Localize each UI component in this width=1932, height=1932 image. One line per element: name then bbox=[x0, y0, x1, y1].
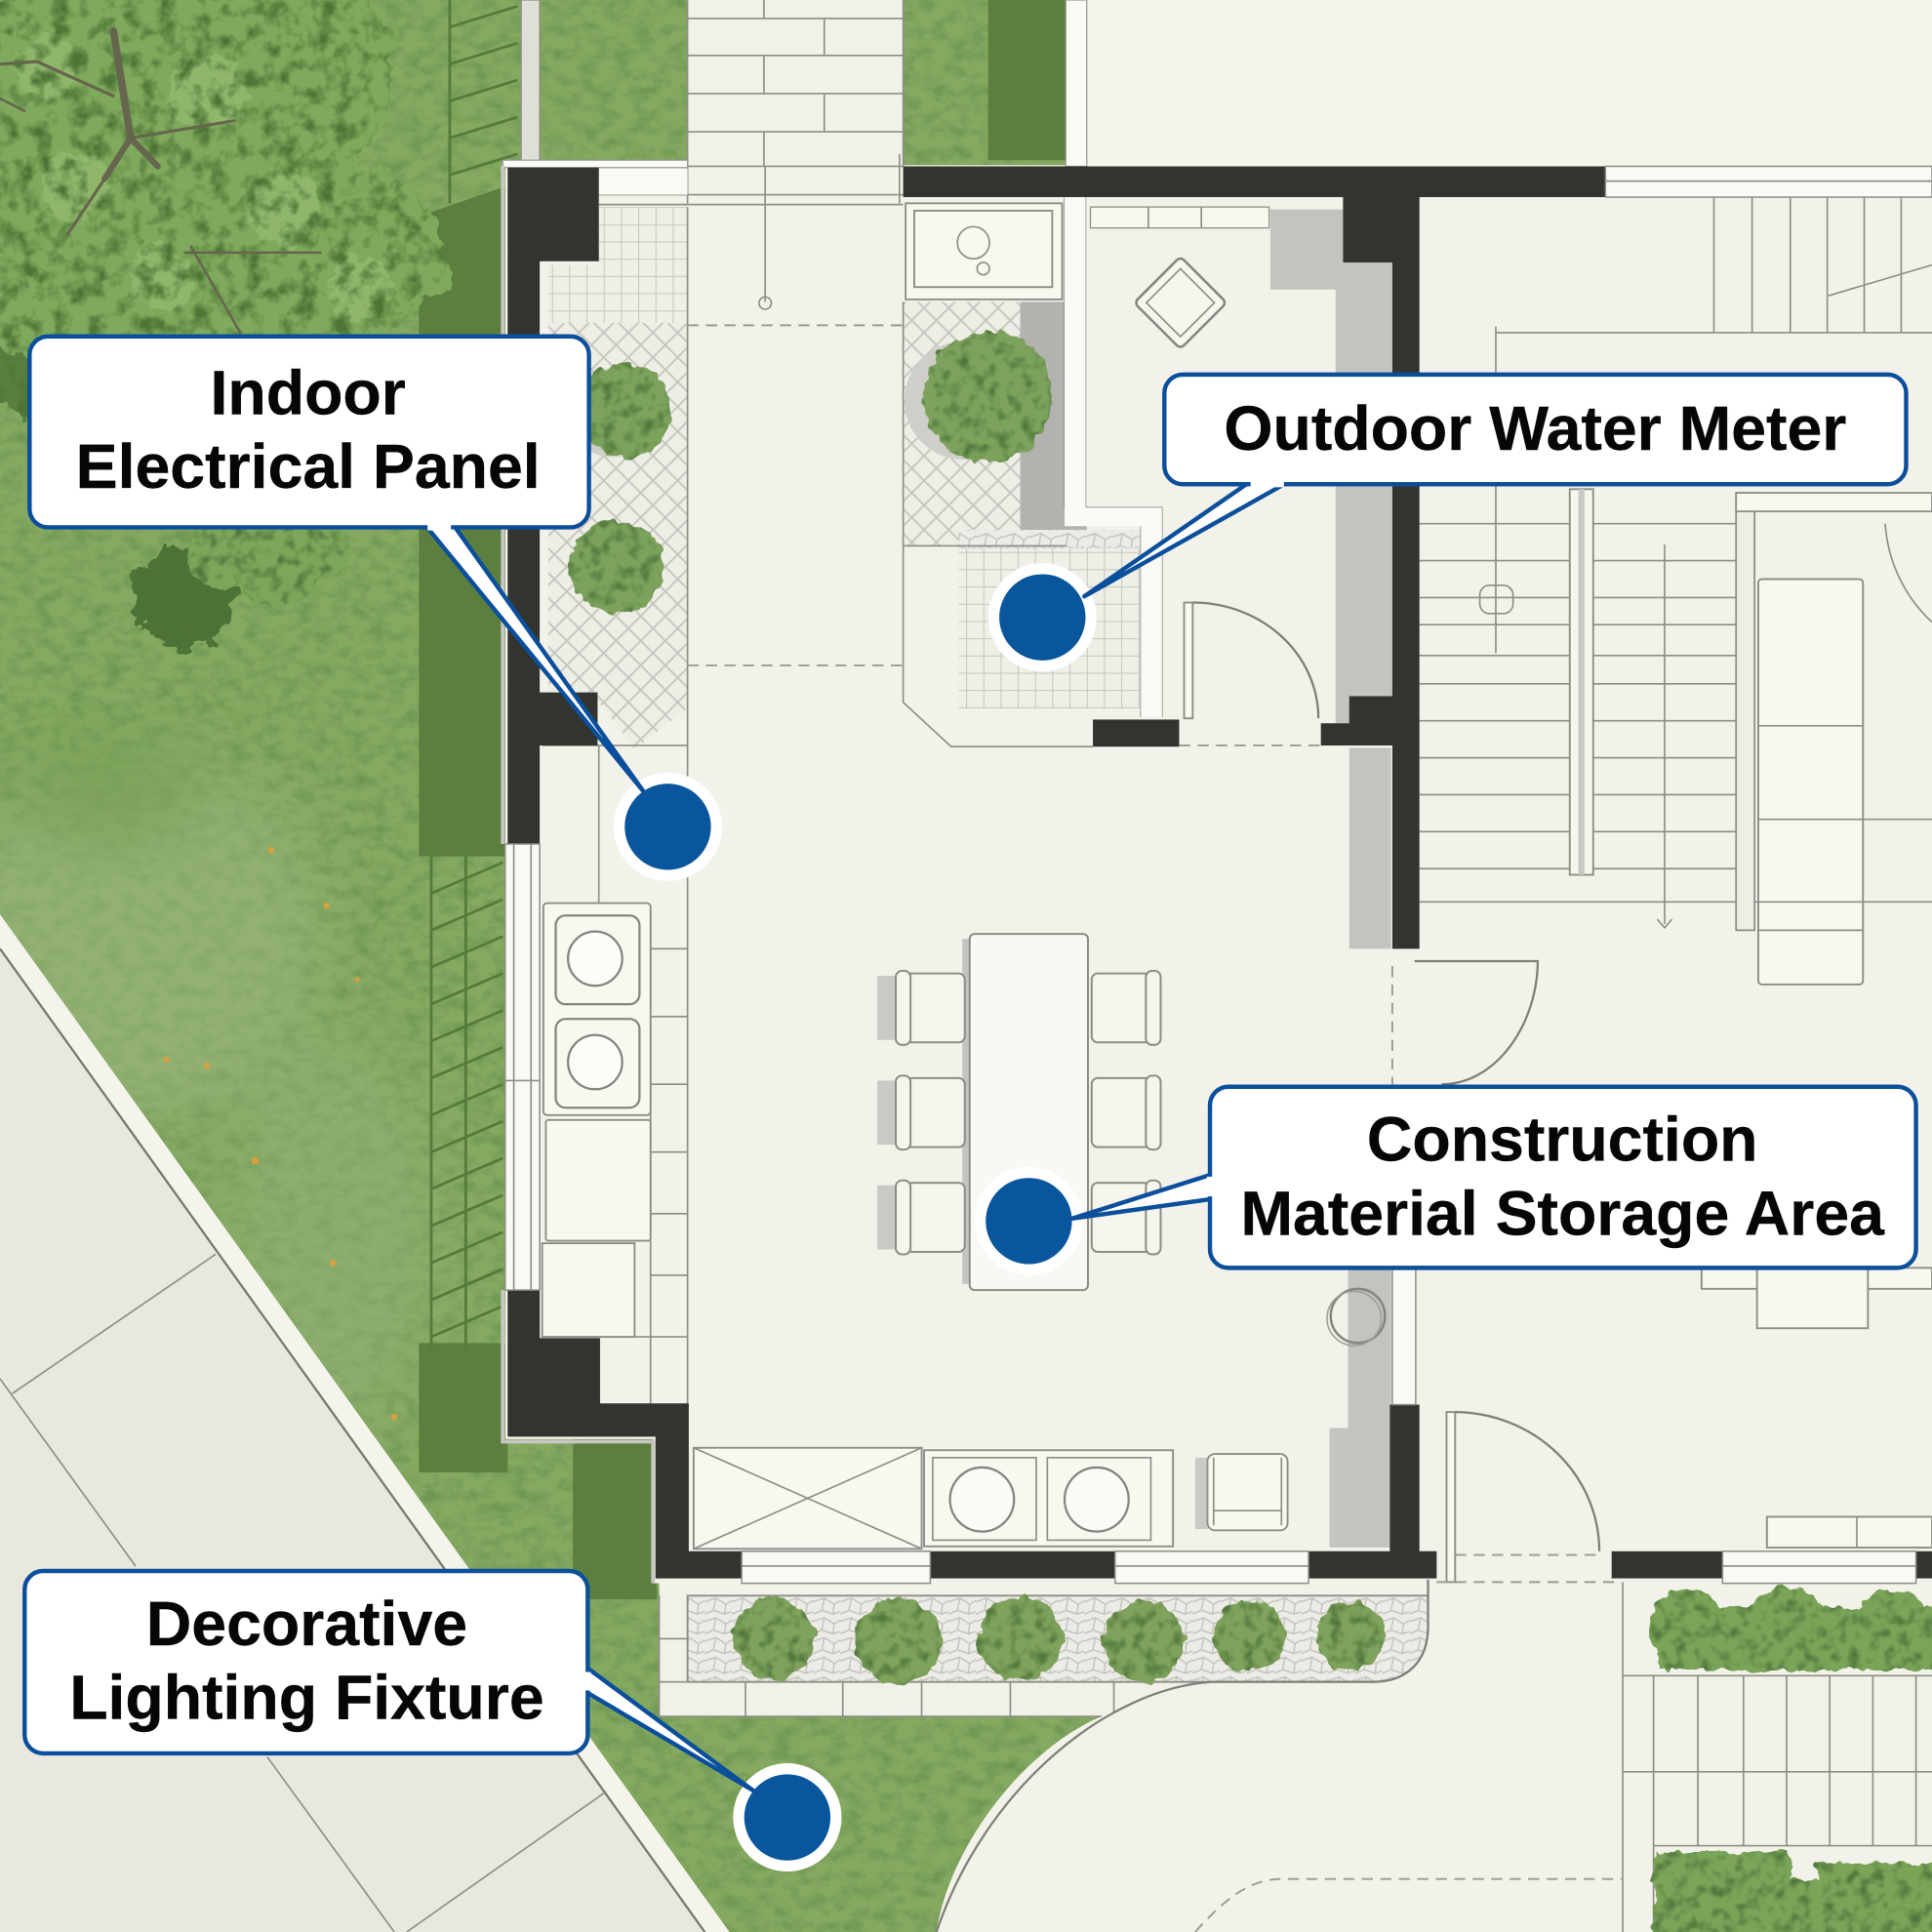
panel: planter and front path bbox=[660, 1580, 1429, 1932]
panel: street pavement bbox=[0, 914, 730, 1932]
callout: Indoor Electrical Panel bbox=[29, 337, 722, 881]
callout: Construction Material Storage Area bbox=[975, 1087, 1916, 1275]
icon: round stool bbox=[1327, 1289, 1385, 1346]
marker: Construction Material Storage Area bbox=[975, 1167, 1083, 1275]
panel: windows bbox=[503, 165, 1932, 1584]
icon: courtyard shrubs bbox=[568, 332, 1054, 614]
chair group bbox=[877, 971, 1161, 1254]
callout: Decorative Lighting Fixture: Decorative bbox=[146, 1589, 467, 1659]
panel: structural walls bbox=[507, 166, 1932, 1579]
panel: paver beds bbox=[548, 207, 1140, 749]
callout: Indoor Electrical Panel: Electrical Panel bbox=[76, 431, 541, 502]
icon: armchair bbox=[1195, 1454, 1288, 1530]
panel: dining table with chairs bbox=[877, 934, 1161, 1290]
callout: Decorative Lighting Fixture bbox=[24, 1571, 841, 1872]
panel: floor plan paper bbox=[505, 165, 1932, 1932]
panel: lower right furniture bbox=[1702, 1268, 1932, 1548]
callout: Decorative Lighting Fixture: Lighting Fixture bbox=[69, 1663, 544, 1733]
icon: planter shrubs bbox=[733, 1597, 1385, 1684]
panel: right patio tiles bbox=[1195, 1582, 1932, 1932]
marker: Decorative Lighting Fixture bbox=[733, 1763, 841, 1872]
icon: tree canopy bbox=[0, 0, 451, 423]
callout: Construction Material Storage Area: Material Storage Area bbox=[1240, 1178, 1885, 1248]
panel: lower kitchen counter bbox=[694, 1448, 1173, 1549]
panel: staircase bbox=[1420, 197, 1932, 928]
panel: building shadow on lawn bbox=[419, 0, 1066, 1599]
callout: Construction Material Storage Area: Construction bbox=[1367, 1105, 1757, 1175]
icon: upper door swing bbox=[1185, 602, 1318, 718]
panel: fence rail bbox=[521, 0, 540, 163]
panel: upper walkway and neighbouring slab bbox=[688, 0, 1932, 166]
callout: Indoor Electrical Panel: Indoor bbox=[211, 357, 406, 427]
icon: right hedge bbox=[1649, 1587, 1932, 1670]
icon: lower tree branch with shadow bbox=[133, 514, 350, 649]
callout: Outdoor Water Meter bbox=[988, 375, 1906, 671]
icon: tree branches bbox=[0, 31, 320, 333]
panel: fence shadows bbox=[431, 0, 517, 1349]
icon: sink cabinet bbox=[906, 203, 1062, 300]
icon: entry door swing bbox=[1436, 1412, 1614, 1582]
icon: lower hedge bbox=[1654, 1852, 1932, 1932]
panel: lawn wildflowers bbox=[163, 847, 397, 1420]
panel: interior shadows bbox=[1270, 210, 1392, 1548]
panel: right room wall and sofa bbox=[1736, 493, 1932, 985]
callout: Outdoor Water Meter: Outdoor Water Meter bbox=[1224, 393, 1846, 463]
icon: diamond side table bbox=[1134, 257, 1227, 349]
panel: interior plan lines bbox=[503, 154, 1392, 1405]
panel: side kitchen counter bbox=[543, 904, 651, 1337]
marker: Outdoor Water Meter bbox=[988, 563, 1097, 671]
marker: Indoor Electrical Panel bbox=[614, 773, 722, 881]
icon: middle door swing bbox=[1415, 961, 1538, 1084]
